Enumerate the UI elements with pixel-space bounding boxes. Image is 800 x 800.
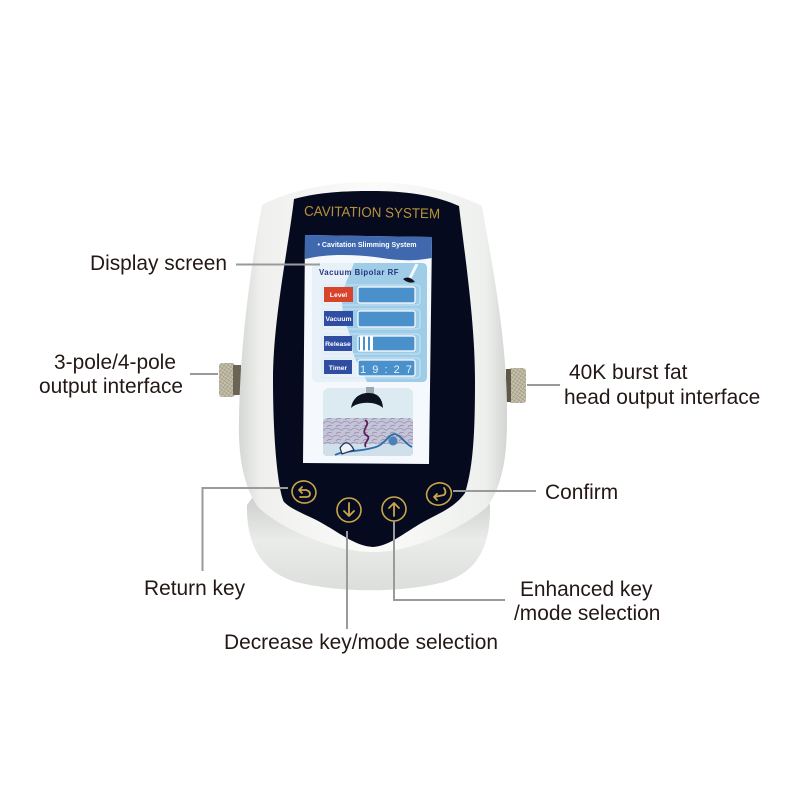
callout: 3-pole/4-pole output interface: [39, 351, 218, 398]
callout: 3-pole/4-pole output interface: output interface: [39, 375, 183, 398]
control panel background: [312, 263, 427, 382]
callout: decrease key/mode selection: Decrease key/mode selection: [224, 631, 498, 654]
button: enhance: [382, 497, 406, 521]
illustration: treatment on skin: [323, 387, 413, 456]
button: return: [290, 478, 318, 506]
screen header: • Cavitation Slimming System: [318, 240, 416, 249]
connector: right output interface: [506, 368, 526, 403]
callout: 40K burst fat head output interface: 40K burst fat: [569, 361, 688, 384]
callout: enhanced key/mode selection: Enhanced key: [520, 578, 653, 601]
mode title: Vacuum Bipolar RF: [319, 268, 399, 277]
connector: left output interface: [219, 363, 241, 397]
row: release: [322, 334, 420, 354]
callout: 40K burst fat head output interface: [527, 361, 760, 409]
device: cavitation machine: [219, 182, 526, 590]
row: timer: [322, 358, 420, 378]
row: level: Level: [330, 292, 347, 299]
button: confirm: [424, 480, 454, 508]
icon: handpiece: [403, 264, 417, 283]
row: release: Release: [325, 341, 351, 348]
touch screen: [303, 235, 432, 464]
callout: enhanced key/mode selection: /mode selection: [514, 602, 660, 625]
row: level: [322, 285, 420, 305]
device title: CAVITATION SYSTEM: [304, 203, 440, 221]
device body shell: [239, 182, 507, 552]
row: timer: 19:27: [360, 364, 412, 376]
button: decrease: [337, 498, 361, 522]
device base: [247, 490, 490, 590]
row: timer: Timer: [329, 365, 348, 372]
callout: enhanced key/mode selection: [394, 521, 660, 625]
callout: 3-pole/4-pole output interface: 3-pole/4-pole: [54, 351, 176, 374]
callout: return key: [144, 488, 288, 600]
callout: 40K burst fat head output interface: head output interface: [564, 386, 760, 409]
callout: confirm: Confirm: [545, 481, 618, 504]
row: vacuum: Vacuum: [325, 316, 352, 323]
black control panel: [273, 191, 475, 547]
callout: display screen: Display screen: [90, 252, 227, 275]
callout: return key: Return key: [144, 577, 246, 600]
row: vacuum: [322, 309, 420, 329]
screen header: [305, 235, 432, 260]
